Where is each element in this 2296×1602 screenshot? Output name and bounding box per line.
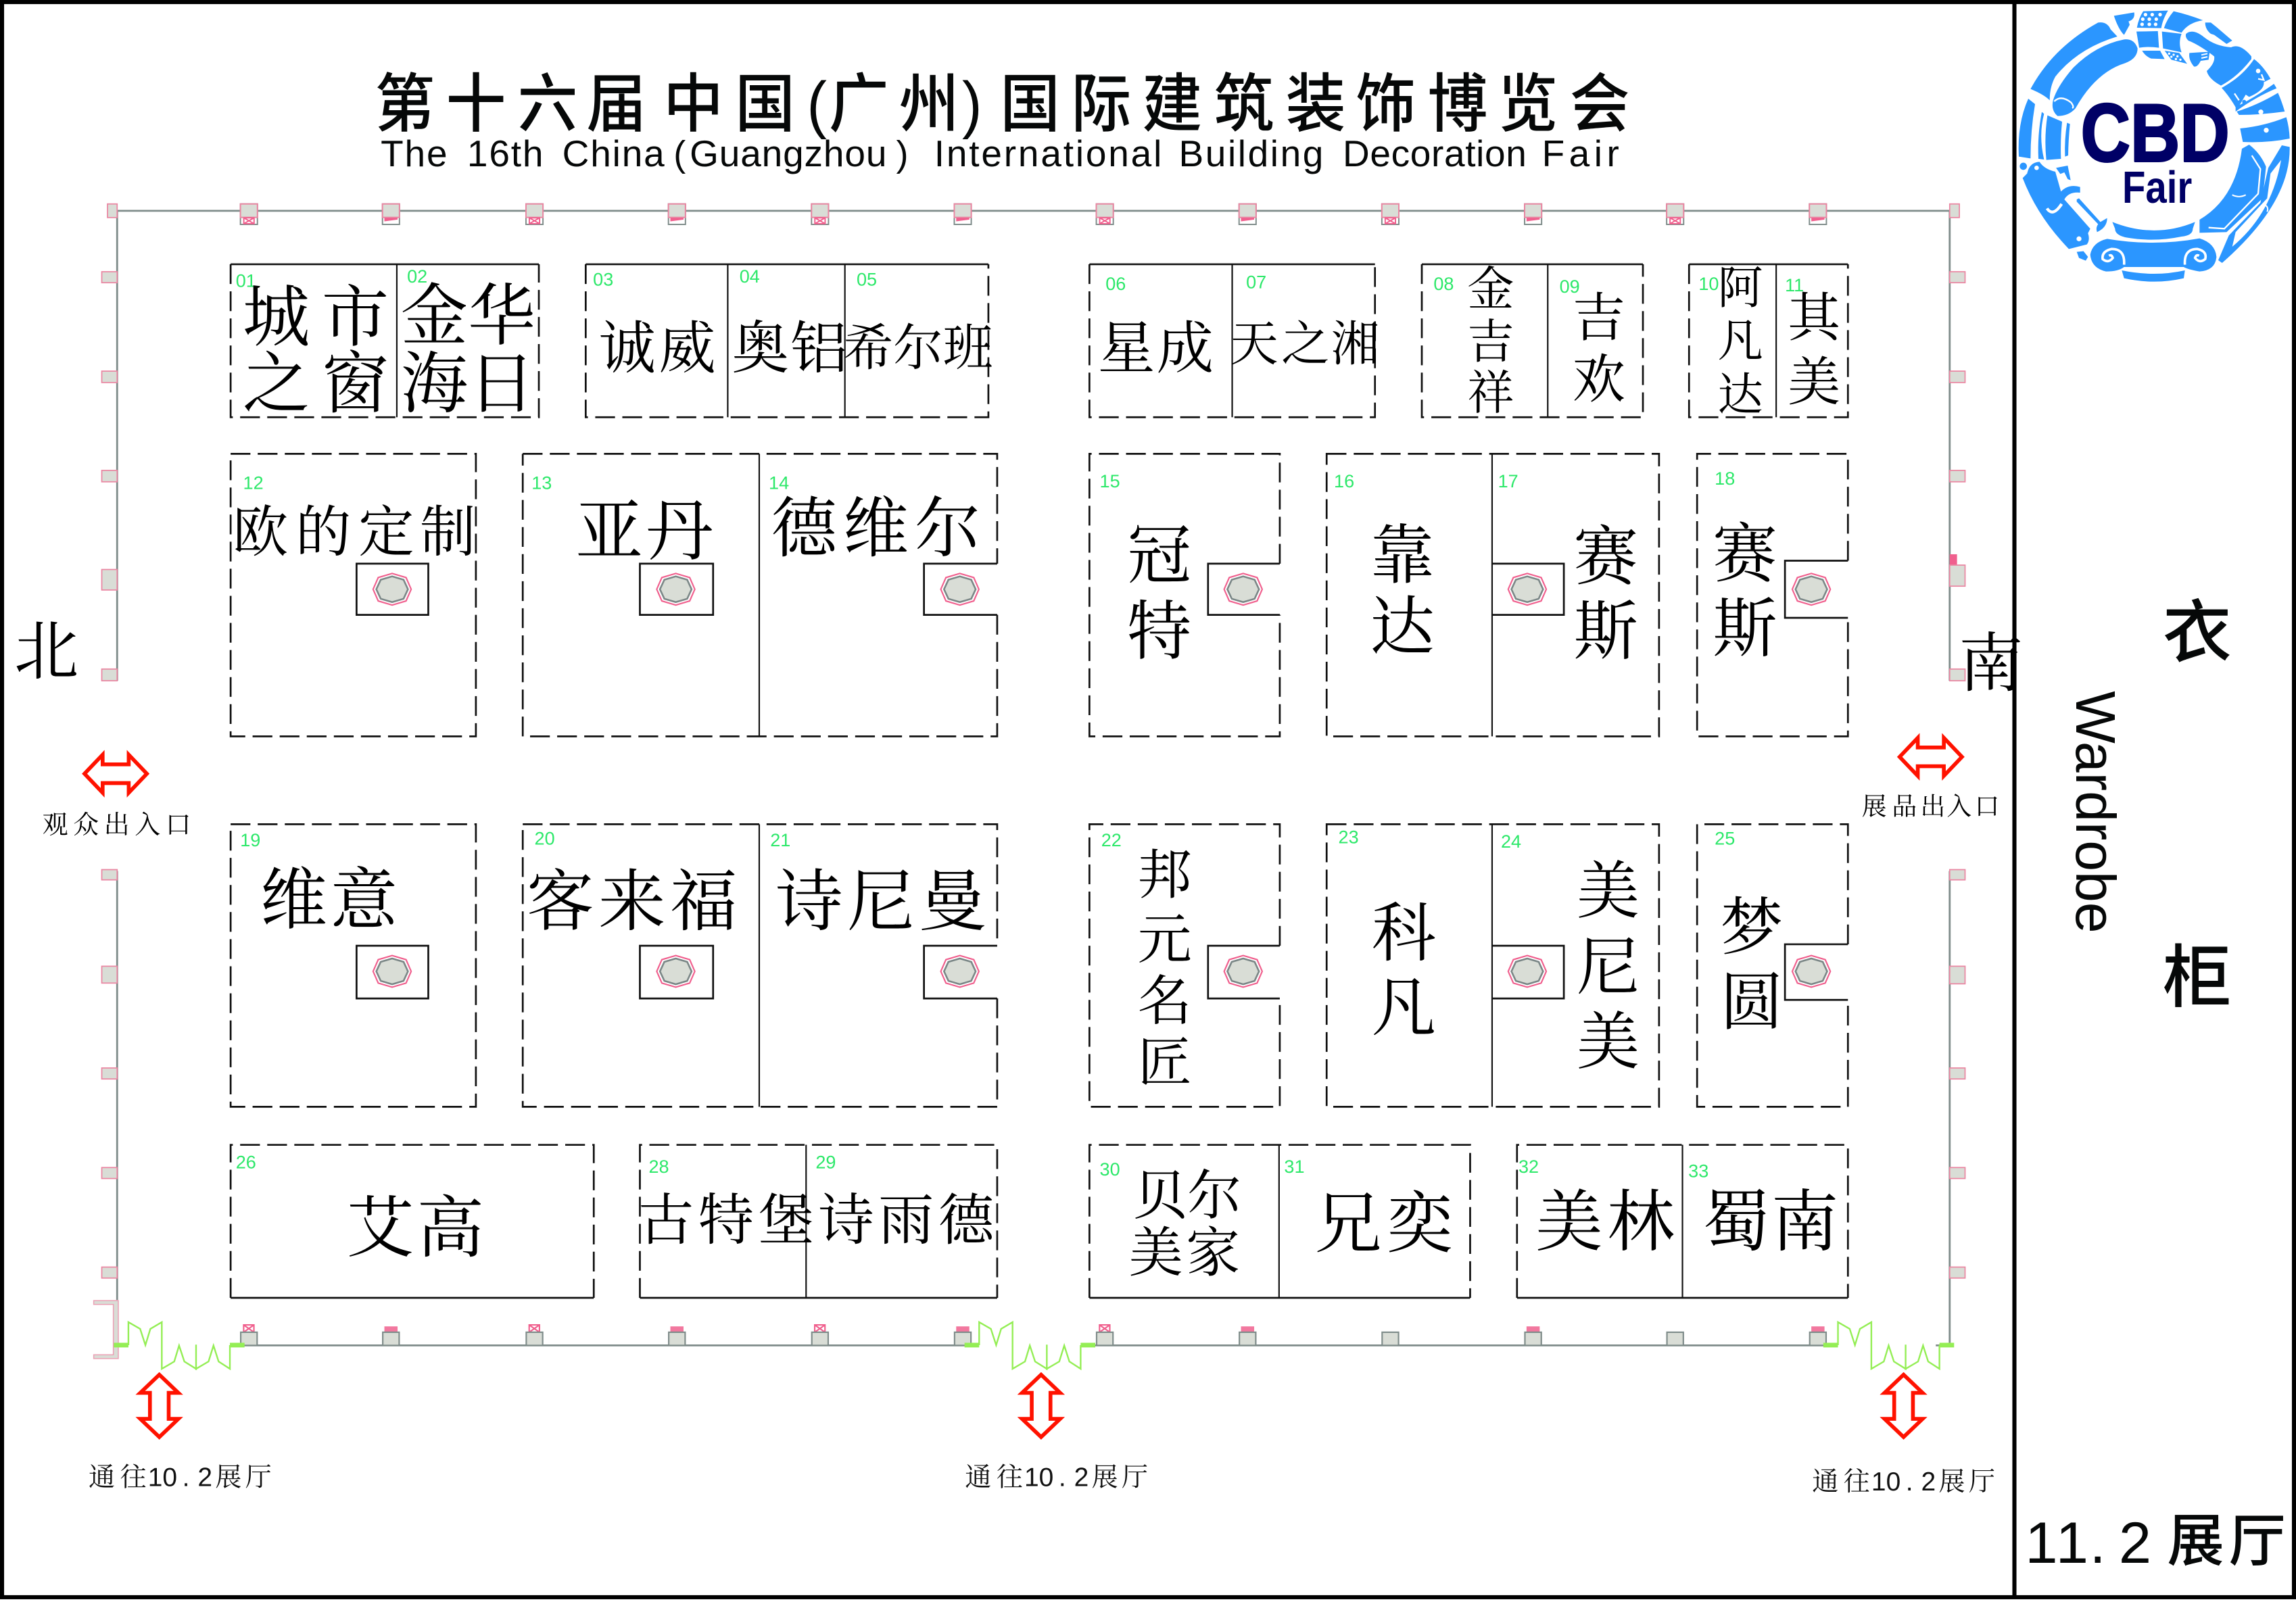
booths 13-14: 14 <box>769 472 789 493</box>
booth 12: 欧的定制 <box>233 502 476 563</box>
row 1 booths 10-11: 阿 <box>1718 263 1763 314</box>
booths 13-14 <box>523 454 997 736</box>
row 1 booths 08-09: 09 <box>1560 276 1580 297</box>
title: english: ( <box>673 134 686 174</box>
row 1 booths 06-07: 07 <box>1246 272 1266 293</box>
bottom wall columns <box>241 1325 1826 1345</box>
booth 19 <box>231 824 476 1107</box>
booth 15: 冠 <box>1127 520 1191 591</box>
booth 22 <box>1089 824 1280 1107</box>
side label: wardrobe chinese 衣: 衣 <box>2163 594 2232 671</box>
booths 16-17: 靠 <box>1370 520 1435 591</box>
title: english: 16th <box>467 132 544 174</box>
booth 18 <box>1697 454 1848 736</box>
row 1 booths 08-09: 金 <box>1467 263 1514 315</box>
row 1 booths 03-05: 诚威 <box>598 318 716 381</box>
row 1 booths 10-11: 美 <box>1788 354 1840 412</box>
row 1 booths 06-07: 天之湘 <box>1230 318 1379 372</box>
booths 23-24: 美 <box>1577 1009 1640 1078</box>
row 1 booths 08-09: 欢 <box>1573 351 1625 409</box>
booth 22: 元 <box>1138 911 1192 970</box>
row 1 booths 08-09: 吉 <box>1573 289 1625 347</box>
title: english: ) <box>896 134 909 174</box>
booth 18: 赛 <box>1713 518 1777 590</box>
row 1 booths 08-09: 吉 <box>1467 316 1514 368</box>
booths 32-33: 美林 <box>1535 1185 1675 1260</box>
hall walls <box>117 211 1950 1345</box>
row 1 booths 10-11: 凡 <box>1718 316 1763 366</box>
arrow: visitor entrance <box>85 754 147 793</box>
title: chinese: 第十六届中国(广州)国际建筑装饰博览会 <box>375 69 1630 140</box>
booths 16-17: 赛 <box>1574 522 1639 593</box>
booths 28-29: 古特堡 <box>638 1190 814 1251</box>
booth 26: 26 <box>236 1151 256 1172</box>
booths 23-24 <box>1326 824 1659 1107</box>
booth 22: 22 <box>1101 829 1122 850</box>
booths 16-17: 17 <box>1498 470 1518 491</box>
booth 19: 19 <box>240 829 260 850</box>
row 1 booths 06-07 <box>1089 264 1379 417</box>
label: to hall 10.2 left: 通往10. 2展厅 <box>89 1463 272 1492</box>
booths 16-17 <box>1326 454 1659 736</box>
logo: CBD Fair: CBD <box>2081 87 2230 179</box>
compass: north: 北 <box>14 616 78 687</box>
booths 13-14: 亚丹 <box>575 494 713 569</box>
booths 16-17: 16 <box>1334 470 1354 491</box>
right wall pillars <box>1950 272 1965 1278</box>
row 1 booths 10-11 <box>1689 263 1848 420</box>
arrow: exhibit entrance <box>1900 738 1962 776</box>
row 1 booths 01-02 <box>231 264 539 422</box>
booths 16-17: 斯 <box>1574 596 1638 668</box>
booth 22: 名 <box>1138 972 1192 1031</box>
row 1 booths 06-07: 06 <box>1105 273 1126 294</box>
booths 30-31: 31 <box>1284 1156 1305 1177</box>
title: english: Decoration <box>1343 132 1527 174</box>
title: english: Fair <box>1542 132 1623 174</box>
row 1 booths 01-02: 01 <box>236 270 256 291</box>
row 1 booths 03-05: 03 <box>593 268 613 289</box>
booths 23-24: 美 <box>1577 857 1640 927</box>
booths 30-31 <box>1089 1145 1470 1298</box>
logo: CBD Fair <box>2019 11 2290 282</box>
booth 25: 圆 <box>1720 969 1783 1038</box>
booth 22: 匠 <box>1138 1034 1192 1093</box>
booths 23-24: 24 <box>1501 831 1521 852</box>
row 1 booths 03-05: 希尔班 <box>843 320 992 376</box>
hall word: 展厅 <box>2167 1509 2286 1573</box>
booths 28-29 <box>638 1145 997 1298</box>
row 1 booths 08-09: 祥 <box>1467 367 1514 419</box>
row 1 booths 03-05 <box>585 264 992 417</box>
top wall columns <box>107 204 1959 224</box>
booths 28-29: 29 <box>815 1151 836 1172</box>
booths 23-24: 凡 <box>1372 973 1436 1044</box>
booths 32-33: 蜀南 <box>1702 1185 1838 1260</box>
booths 20-21: 客来福 <box>527 865 738 940</box>
row 1 booths 03-05: 04 <box>740 266 760 287</box>
row 1 booths 01-02: 02 <box>407 266 427 287</box>
title: english: Guangzhou <box>690 132 887 174</box>
booths 30-31: 美家 <box>1129 1224 1240 1284</box>
right panel divider <box>2013 1 2015 1599</box>
label: to hall 10.2 middle: 通往10. 2展厅 <box>965 1463 1148 1492</box>
booths 32-33: 32 <box>1518 1156 1539 1177</box>
side label: wardrobe english: Wardrobe <box>2064 691 2126 933</box>
booths 32-33 <box>1517 1145 1848 1298</box>
booths 20-21: 诗尼曼 <box>775 865 986 940</box>
booths 20-21: 21 <box>770 829 790 850</box>
booth 15: 特 <box>1127 596 1191 668</box>
row 1 booths 08-09 <box>1422 263 1643 419</box>
logo: CBD Fair: Fair <box>2122 163 2192 213</box>
booth 12: 12 <box>243 472 264 493</box>
booth 22: 邦 <box>1138 846 1192 906</box>
booths 20-21 <box>523 824 997 1107</box>
title: english: China <box>563 132 666 174</box>
row 1 booths 01-02: 金华 <box>401 279 535 354</box>
compass: south: 南 <box>1959 629 2023 700</box>
booths 16-17: 达 <box>1370 592 1435 664</box>
booths 32-33: 33 <box>1688 1160 1708 1181</box>
booths 20-21: 20 <box>535 828 555 849</box>
booth 25: 梦 <box>1720 894 1783 964</box>
row 1 booths 10-11: 达 <box>1718 370 1764 420</box>
side label: wardrobe chinese 柜: 柜 <box>2163 939 2232 1016</box>
booth 26 <box>231 1145 594 1298</box>
booths 30-31: 兄奕 <box>1314 1186 1454 1261</box>
green doors <box>114 1322 1954 1369</box>
title: english: Building <box>1178 132 1325 174</box>
left wall pillars <box>94 272 118 1359</box>
row 1 booths 10-11: 11 <box>1785 274 1804 295</box>
booths 13-14: 德维尔 <box>771 493 980 566</box>
booths 28-29: 28 <box>648 1156 669 1177</box>
row 1 booths 03-05: 奥铝 <box>732 318 848 381</box>
row 1 booths 06-07: 星成 <box>1098 318 1214 381</box>
row 1 booths 10-11: 其 <box>1788 289 1843 347</box>
title: english: International <box>934 132 1164 174</box>
booths 30-31: 30 <box>1100 1159 1120 1180</box>
row 1 booths 03-05: 05 <box>857 268 877 289</box>
booths 23-24: 科 <box>1372 898 1436 969</box>
booth 25 <box>1697 824 1848 1107</box>
row 1 booths 08-09: 08 <box>1433 273 1454 294</box>
booth 18: 斯 <box>1713 593 1777 665</box>
row 1 booths 01-02: 城市 <box>243 281 389 356</box>
booth 15 <box>1089 454 1280 736</box>
row 1 booths 01-02: 之窗 <box>243 347 389 422</box>
arrow: to hall 10.2 right <box>1884 1375 1923 1437</box>
label: to hall 10.2 right: 通往10. 2展厅 <box>1812 1467 1995 1497</box>
booth 12 <box>231 454 476 736</box>
booths 23-24: 23 <box>1339 827 1359 848</box>
booth 18: 18 <box>1715 468 1735 489</box>
label: visitor entrance: 观众出入口 <box>43 811 191 840</box>
booths 28-29: 诗雨德 <box>818 1190 996 1251</box>
booths 13-14: 13 <box>531 472 552 493</box>
label: exhibit entrance: 展品出入口 <box>1862 793 1999 821</box>
row 1 booths 01-02: 海日 <box>401 347 535 422</box>
hall number: 11.2 <box>2025 1511 2151 1576</box>
arrow: to hall 10.2 left <box>140 1375 178 1437</box>
booth 26: 艾高 <box>346 1191 484 1266</box>
arrow: to hall 10.2 middle <box>1022 1375 1060 1437</box>
booths 23-24: 尼 <box>1577 933 1640 1003</box>
booth 25: 25 <box>1715 828 1735 849</box>
booths 30-31: 贝尔 <box>1133 1167 1241 1226</box>
booth 15: 15 <box>1100 470 1120 491</box>
title: english: The <box>381 132 448 174</box>
row 1 booths 10-11: 10 <box>1698 273 1719 294</box>
booth 19: 维意 <box>260 863 398 938</box>
